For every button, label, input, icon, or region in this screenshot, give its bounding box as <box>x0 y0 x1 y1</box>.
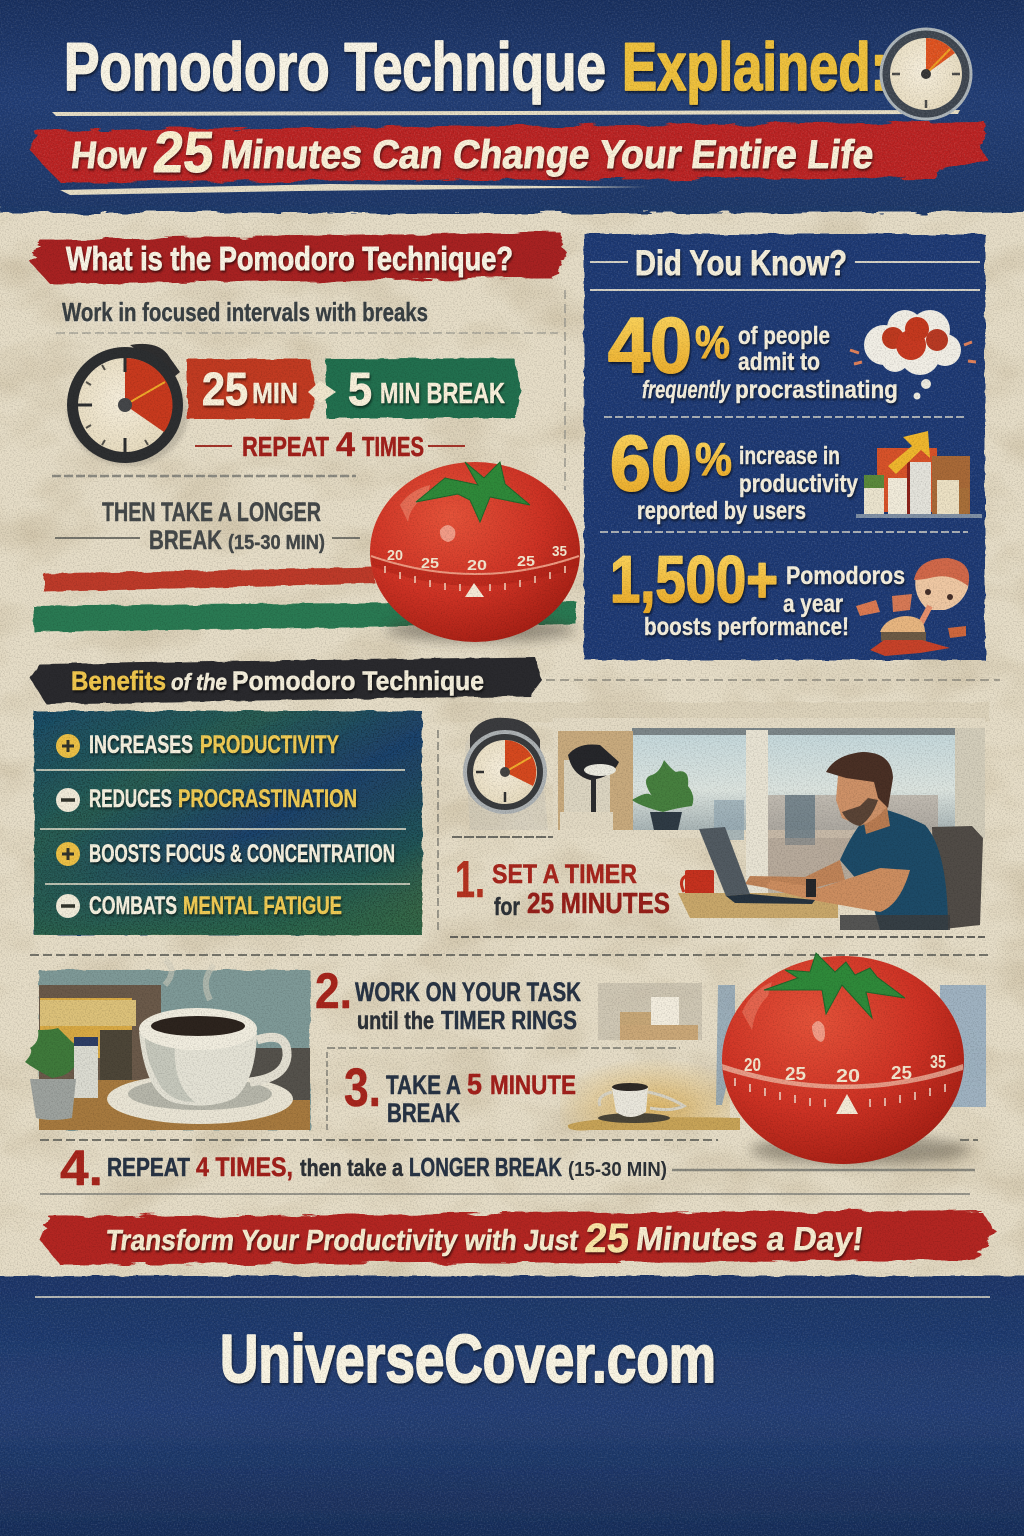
saucer <box>107 1074 293 1124</box>
box: 5 min break: 5 <box>348 363 372 415</box>
step 4: LONGER BREAK <box>409 1152 562 1182</box>
bottom banner: Transform Your Productivity with Just <box>104 1225 580 1257</box>
panel: what is body <box>33 290 580 642</box>
bottom banner <box>40 1210 995 1265</box>
header rule bottom <box>60 184 650 195</box>
stat: 60 percent: productivity <box>739 470 858 498</box>
benefit row 2 <box>56 785 357 813</box>
stat: 1500 pomodoros <box>610 542 905 641</box>
stat: 60 percent: reported by users <box>637 497 806 525</box>
section heading: benefits: of the <box>171 669 227 695</box>
heading: did you know: Did You Know? <box>635 244 847 283</box>
benefit row 1: INCREASES <box>89 731 193 759</box>
icon: stacked boxes <box>598 983 702 1040</box>
stat: 40 percent: % <box>695 316 730 368</box>
icon: tomato timer <box>370 462 580 642</box>
step 4 <box>40 1140 978 1196</box>
repeat 4 times: 4 <box>336 426 355 464</box>
benefit row 3 <box>56 840 395 868</box>
step 2 text: WORK ON YOUR TASK <box>355 977 581 1007</box>
box: 25 min: MIN <box>252 378 298 410</box>
panel: benefits list <box>34 711 422 935</box>
stat: 40 percent: frequently <box>642 376 731 404</box>
step 2 text <box>315 963 581 1035</box>
icon: tomato timer: 20 <box>467 557 487 574</box>
step 1 text: 25 MINUTES <box>527 888 670 920</box>
window scene <box>553 718 985 898</box>
illustration: coffee cup scene <box>25 960 310 1130</box>
step 1 text: for <box>494 893 520 921</box>
icon: thought cloud <box>850 310 976 400</box>
subtitle: 25 <box>151 120 217 185</box>
stat: 60 percent <box>610 419 858 525</box>
icon: potted plant <box>632 760 693 830</box>
icon: desk lamp <box>568 744 619 812</box>
longer break text: THEN TAKE A LONGER <box>102 497 321 527</box>
section heading: benefits <box>30 657 542 704</box>
subtitle: How <box>69 134 148 177</box>
stat: 1500 pomodoros: Pomodoros <box>786 562 905 590</box>
step 4: 4. <box>60 1140 103 1196</box>
step 3 text: BREAK <box>387 1098 460 1128</box>
person at laptop <box>699 752 983 930</box>
panel: step 1 <box>438 702 990 937</box>
stat: 60 percent: % <box>695 433 732 485</box>
box: 25 min <box>187 359 316 419</box>
icon: large tomato timer: 25 <box>785 1064 806 1084</box>
icon: tomato timer: 25 <box>517 553 535 570</box>
desk <box>678 893 838 918</box>
step 3 text: MINUTE <box>490 1070 576 1100</box>
step 1 text <box>455 851 670 921</box>
intro text: Work in focused intervals with breaks <box>62 297 428 327</box>
step 3 <box>327 1045 740 1130</box>
step 4: 4 TIMES, <box>196 1152 293 1182</box>
icon: timer clock <box>67 344 188 466</box>
step 2 text: TIMER RINGS <box>441 1005 577 1035</box>
stat: 40 percent <box>608 301 898 404</box>
step 2 text: 2. <box>315 963 352 1019</box>
stat: 40 percent: 40 <box>608 301 692 389</box>
section heading: what is: What is the Pomodoro Technique? <box>66 240 513 277</box>
icon: wall timer <box>463 718 548 830</box>
bottom banner: Minutes a Day! <box>634 1221 866 1258</box>
icon: large tomato timer: 35 <box>930 1052 946 1072</box>
step 1 text: SET A TIMER <box>492 859 637 889</box>
icon: large tomato timer <box>716 953 986 1165</box>
subtitle: Minutes Can Change Your Entire Life <box>219 132 876 177</box>
stat: 1500 pomodoros: boosts performance! <box>644 613 849 641</box>
longer break text: BREAK <box>149 525 222 555</box>
stat: 40 percent: of people <box>738 322 830 350</box>
benefit row 3: BOOSTS FOCUS & CONCENTRATION <box>89 840 395 868</box>
stat: 60 percent: increase in <box>739 442 840 470</box>
icon: large tomato timer: 20 <box>744 1055 761 1075</box>
red stroke <box>44 567 375 592</box>
icon: tomato timer: 20 <box>387 547 403 564</box>
benefit row 4: COMBATS <box>89 892 177 920</box>
box: 5 min break <box>326 358 521 418</box>
box: 25 min: 25 <box>202 363 248 415</box>
footer url: UniverseCover.com <box>220 1321 716 1397</box>
icon: title timer <box>881 29 971 119</box>
subtitle banner <box>30 122 988 182</box>
stat: 40 percent: admit to <box>738 348 820 376</box>
repeat 4 times <box>195 426 465 464</box>
small plant <box>25 1028 81 1078</box>
cup <box>250 1037 287 1082</box>
heading: did you know <box>590 244 980 290</box>
benefit row 1 <box>56 731 339 759</box>
icon: large tomato timer: 25 <box>891 1063 912 1083</box>
green stroke <box>33 601 576 632</box>
benefit row 4 <box>56 892 342 920</box>
section heading: benefits: Benefits <box>71 666 166 696</box>
icon: small coffee cup <box>568 1083 740 1130</box>
panel: did you know <box>584 234 985 660</box>
title: Pomodoro Technique <box>64 29 606 105</box>
stat: 1500 pomodoros: 1,500+ <box>610 542 778 616</box>
repeat 4 times: TIMES <box>362 431 424 462</box>
benefit row 2: PROCRASTINATION <box>178 785 357 813</box>
icon: mug <box>681 870 714 899</box>
icon: large tomato timer: 20 <box>836 1066 860 1086</box>
section heading: benefits: Pomodoro Technique <box>232 666 484 696</box>
section heading: what is <box>30 232 566 284</box>
longer break text <box>55 497 360 555</box>
benefit row 2: REDUCES <box>89 785 172 813</box>
benefit row 4: MENTAL FATIGUE <box>183 892 342 920</box>
step 3 text: 5 <box>467 1069 482 1101</box>
benefit row 1: PRODUCTIVITY <box>200 731 339 759</box>
bottom banner: 25 <box>583 1215 631 1261</box>
box: 5 min break: MIN BREAK <box>380 378 505 410</box>
stat: 40 percent: procrastinating <box>735 376 898 404</box>
icon: cartoon person eating <box>856 558 969 656</box>
step 1 text: 1. <box>455 851 485 909</box>
longer break text: (15-30 MIN) <box>228 532 325 554</box>
stat: 1500 pomodoros: a year <box>783 590 843 618</box>
header <box>30 29 988 195</box>
subtitle <box>69 120 876 185</box>
arrow: diamond connector <box>308 381 336 403</box>
icon: growth bars <box>856 431 982 518</box>
step 2 text: until the <box>357 1007 434 1035</box>
icon: tomato timer: 25 <box>421 555 439 572</box>
step 4: then take a <box>300 1155 404 1182</box>
title: Explained: <box>622 29 888 105</box>
header rule top <box>52 110 960 116</box>
step 3 text <box>344 1058 576 1128</box>
repeat 4 times: REPEAT <box>242 431 329 462</box>
icon: tomato timer: 35 <box>552 543 567 560</box>
stat: 60 percent: 60 <box>610 419 692 507</box>
step 4: (15-30 MIN) <box>568 1159 667 1181</box>
step 4: REPEAT <box>107 1152 190 1182</box>
step 3 text: TAKE A <box>386 1070 461 1100</box>
step 3 text: 3. <box>344 1058 381 1118</box>
